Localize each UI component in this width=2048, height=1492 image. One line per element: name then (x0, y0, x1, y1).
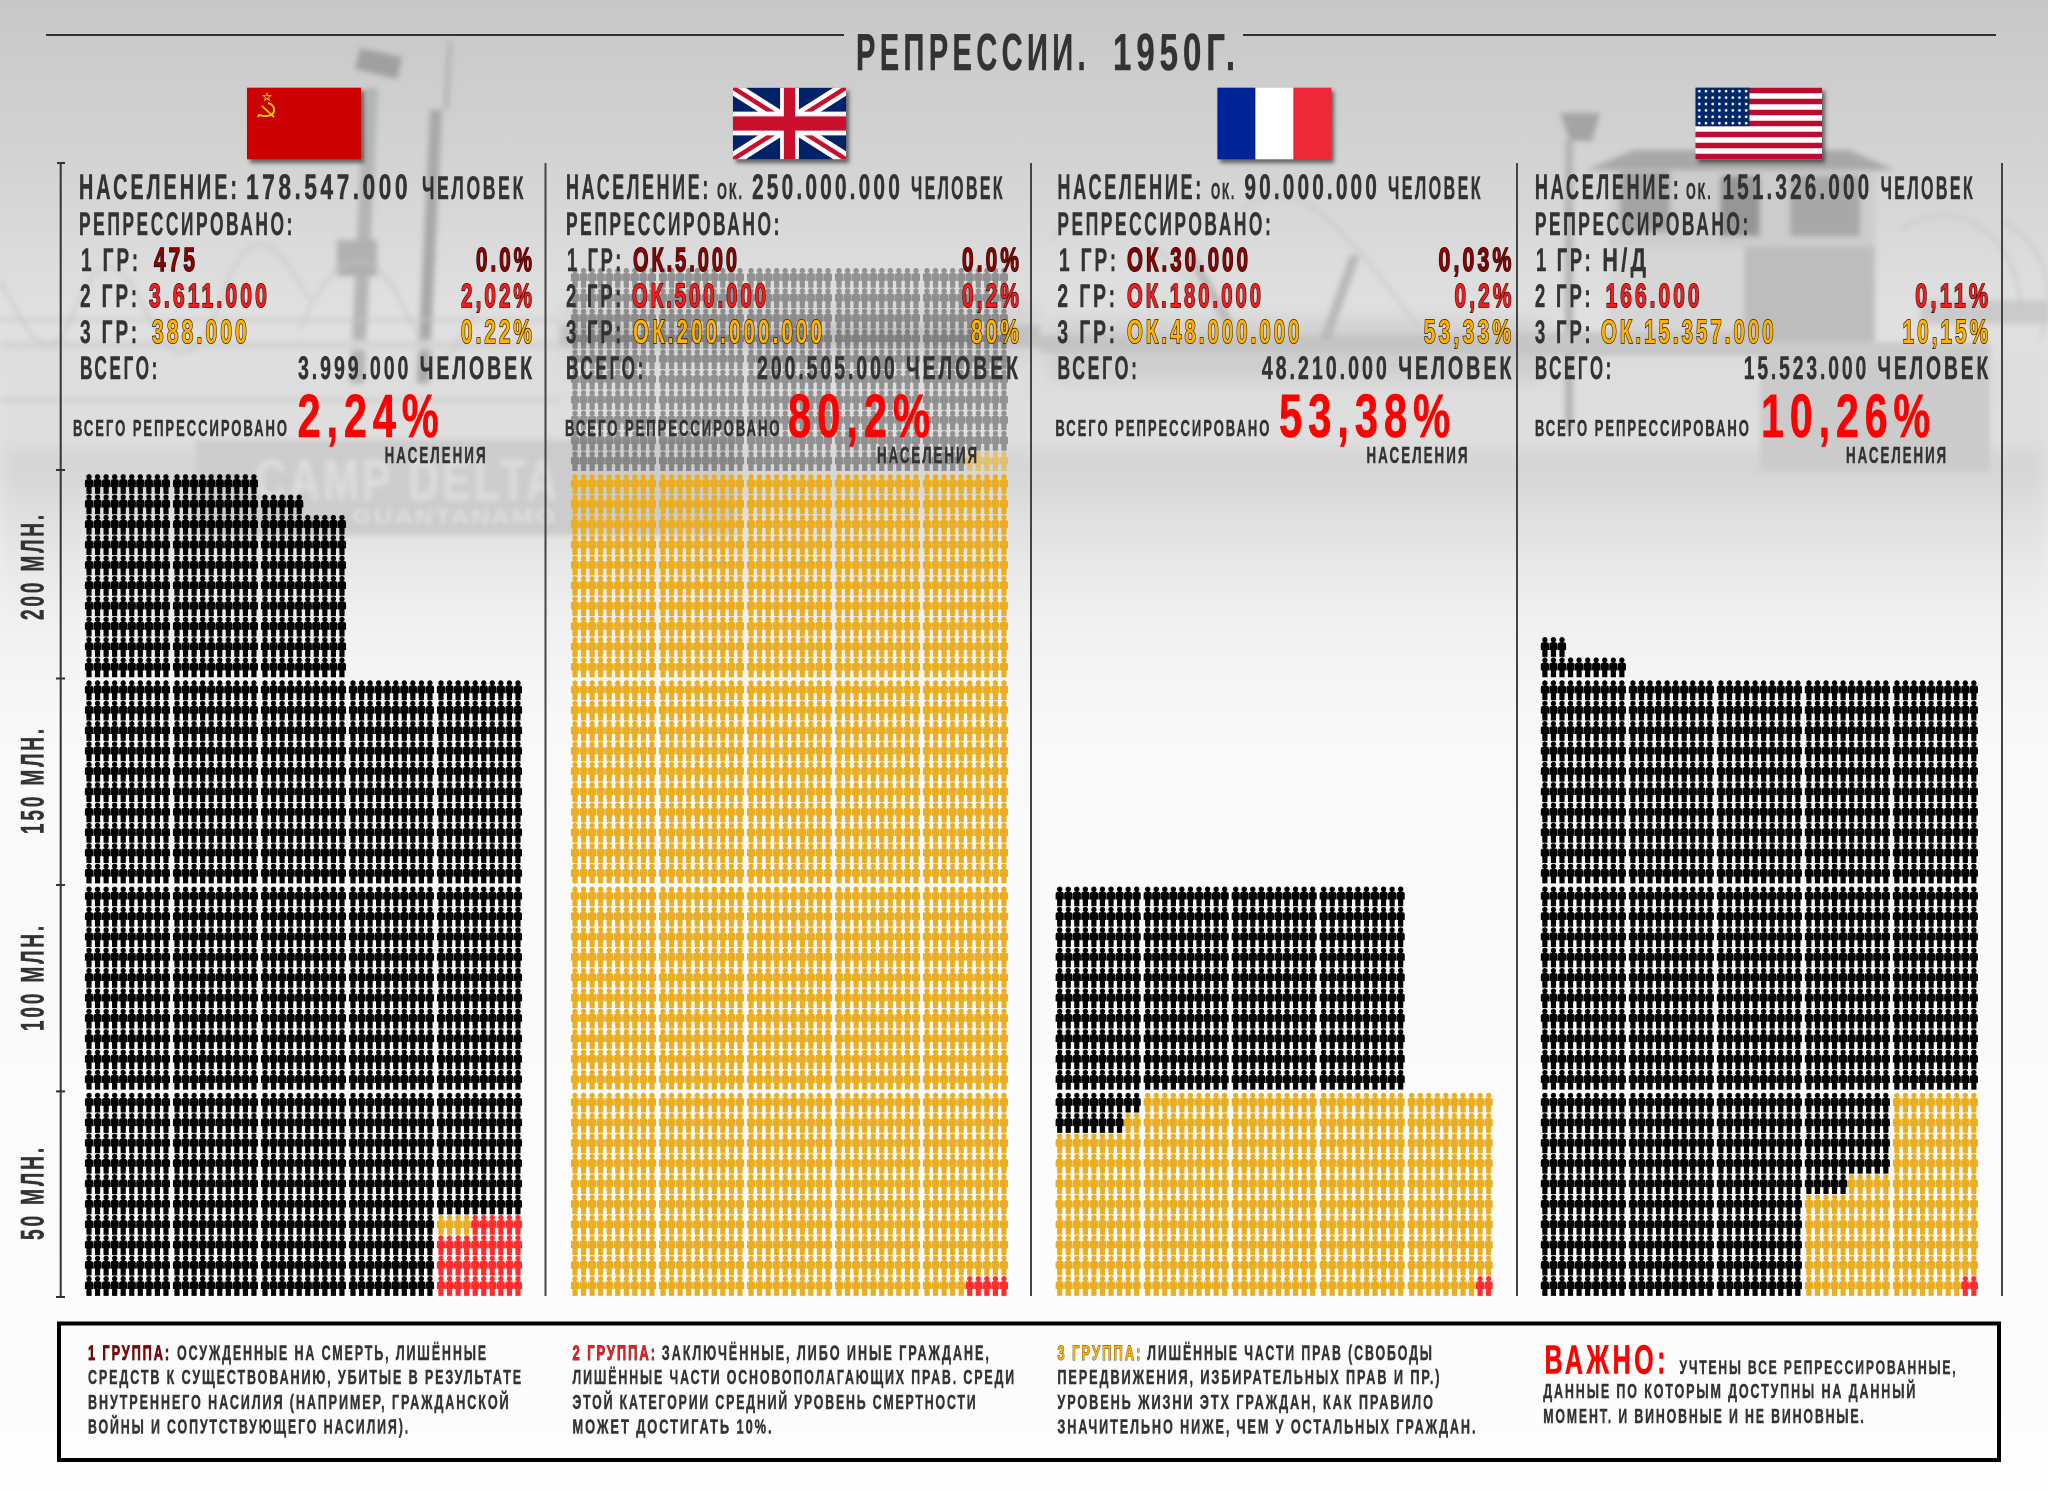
title (46, 24, 1996, 82)
flag: UK (733, 88, 849, 163)
stats: France: 53,33% (1424, 313, 1514, 350)
stats: USSR: РЕПРЕССИРОВАНО: (79, 206, 295, 242)
stats: UK: ОК.200.000.000 (633, 313, 825, 350)
stats: UK: 3 ГР: (566, 314, 624, 350)
panel: USA (1535, 88, 1991, 1296)
column dividers (546, 163, 2002, 1296)
stats: UK: ОК. (717, 178, 744, 204)
stats: UK: ВСЕГО: (566, 350, 646, 386)
stats: USA: 0,11% (1915, 277, 1991, 314)
stats: USSR: 178.547.000 (246, 168, 411, 207)
flag: USA (1696, 88, 1825, 163)
legend: group 3: ЛИШЁННЫЕ ЧАСТИ ПРАВ (СВОБОДЫ (1147, 1342, 1434, 1365)
stats: UK: ЧЕЛОВЕК (911, 170, 1005, 206)
stats: France: 48.210.000 ЧЕЛОВЕК (1262, 350, 1514, 386)
stats: UK: 200.505.000 ЧЕЛОВЕК (757, 350, 1021, 386)
flag: France (1217, 88, 1334, 163)
legend: group 2: МОЖЕТ ДОСТИГАТЬ 10%. (572, 1416, 774, 1438)
stats: USSR: ВСЕГО: (80, 350, 160, 386)
axis: population scale: 150 МЛН. (14, 726, 50, 834)
axis: population scale: 100 МЛН. (14, 923, 50, 1031)
stats: USSR: 3 ГР: (80, 314, 140, 350)
stats: UK: ВСЕГО РЕПРЕССИРОВАНО (565, 415, 782, 441)
legend: group 2: 2 ГРУППА: (572, 1341, 657, 1365)
legend: group 1: ВОЙНЫ И СОПУТСТВУЮЩЕГО НАСИЛИЯ). (88, 1414, 410, 1438)
legend: group 2: ЭТОЙ КАТЕГОРИИ СРЕДНИЙ УРОВЕНЬ СМЕРТНОСТИ (572, 1390, 978, 1414)
stats: USA: ОК.15.357.000 (1601, 313, 1777, 350)
stats: USA: НАСЕЛЕНИЕ: (1535, 168, 1682, 207)
stats: UK: 2 ГР: (566, 278, 624, 314)
stats: France: РЕПРЕССИРОВАНО: (1057, 206, 1273, 242)
stats: UK: ОК.5.000 (633, 241, 740, 278)
stats: USSR: 2 ГР: (80, 278, 140, 314)
legend: group 1: 1 ГРУППА: (88, 1341, 171, 1365)
stats: France: ВСЕГО: (1057, 350, 1140, 386)
stats: France: 1 ГР: (1059, 242, 1119, 278)
stats: UK: 1 ГР: (567, 242, 624, 278)
stats: USSR: ВСЕГО РЕПРЕССИРОВАНО (73, 415, 289, 441)
stats: UK: ОК.500.000 (632, 277, 769, 314)
stats: France: НАСЕЛЕНИЕ: (1057, 168, 1204, 207)
stats: USSR: 2,02% (461, 277, 535, 314)
legend: group 1 (88, 1341, 523, 1438)
stats: USA: Н/Д (1602, 242, 1649, 278)
callout: important note (1543, 1336, 1958, 1428)
stats: USA: РЕПРЕССИРОВАНО: (1535, 206, 1751, 242)
legend: group 1: ВНУТРЕННЕГО НАСИЛИЯ (НАПРИМЕР, ГРАЖДАНСКОЙ (88, 1390, 510, 1414)
chart: USSR population figures (85, 474, 522, 1296)
stats: UK: 250.000.000 (752, 168, 903, 207)
stats: USA: 2 ГР: (1535, 278, 1593, 314)
stats: USSR: НАСЕЛЕНИЕ: (79, 168, 240, 207)
stats: USA: 10,15% (1902, 313, 1991, 350)
stats: USA: 151.326.000 (1722, 168, 1872, 207)
stats: UK: НАСЕЛЕНИЯ (877, 442, 979, 468)
stats: UK: 0,2% (962, 277, 1022, 314)
stats: USSR: 3.999.000 ЧЕЛОВЕК (298, 350, 535, 386)
stats: France: ОК.30.000 (1127, 241, 1251, 278)
stats: USA: 10,26% (1761, 382, 1936, 450)
panel: UK (565, 88, 1022, 1296)
stats: USSR: 0.0% (476, 241, 535, 278)
stats: France: ЧЕЛОВЕК (1388, 170, 1483, 206)
axis: population scale: 50 МЛН. (14, 1145, 50, 1240)
stats: France: 3 ГР: (1057, 314, 1118, 350)
stats: France (1055, 168, 1514, 468)
stats: USA: ОК. (1686, 178, 1713, 204)
chart: USA population figures (1541, 637, 1978, 1296)
stats: France: 90.000.000 (1244, 168, 1380, 207)
stats: USA (1535, 168, 1991, 468)
title: РЕПРЕССИИ. (856, 24, 1090, 82)
stats: USSR: НАСЕЛЕНИЯ (385, 442, 488, 468)
legend: group 3 (1057, 1341, 1477, 1438)
stats: UK: РЕПРЕССИРОВАНО: (566, 206, 782, 242)
legend: group 1: ОСУЖДЕННЫЕ НА СМЕРТЬ, ЛИШЁННЫЕ (177, 1342, 488, 1365)
stats: USSR (73, 168, 535, 468)
stats: UK: 0.0% (962, 241, 1022, 278)
stats: USSR: 475 (154, 241, 198, 278)
stats: France: 2 ГР: (1057, 278, 1118, 314)
legend: group 3: УРОВЕНЬ ЖИЗНИ ЭТХ ГРАЖДАН, КАК ПРАВИЛО (1057, 1392, 1435, 1414)
stats: France: 53,38% (1279, 382, 1456, 450)
stats: France: ОК. (1211, 178, 1236, 204)
legend: group 2 (572, 1341, 1016, 1438)
stats: USA: 3 ГР: (1535, 314, 1593, 350)
stats: USA: НАСЕЛЕНИЯ (1846, 442, 1948, 468)
legend: group 3: ПЕРЕДВИЖЕНИЯ, ИЗБИРАТЕЛЬНЫХ ПРАВ И ПР.) (1057, 1367, 1441, 1389)
panel: USSR (73, 88, 535, 1296)
stats: France: НАСЕЛЕНИЯ (1366, 442, 1470, 468)
stats: USA: ВСЕГО РЕПРЕССИРОВАНО (1535, 415, 1751, 441)
stats: UK: 80% (971, 313, 1022, 350)
stats: France: ОК.48.000.000 (1127, 313, 1302, 350)
legend box (59, 1324, 1999, 1460)
title: 1950Г. (1113, 24, 1240, 82)
stats: UK: 80,2% (788, 382, 936, 450)
stats: USSR: 2,24% (298, 382, 444, 450)
stats: UK (565, 168, 1022, 468)
legend: group 3: 3 ГРУППА: (1057, 1341, 1142, 1365)
stats: France: 0,2% (1454, 277, 1514, 314)
callout: important note: ВАЖНО: (1544, 1336, 1669, 1382)
chart: France population figures (1056, 886, 1493, 1296)
stats: France: ВСЕГО РЕПРЕССИРОВАНО (1055, 415, 1271, 441)
stats: USA: 166.000 (1606, 277, 1703, 314)
legend: group 2: ЗАКЛЮЧЁННЫЕ, ЛИБО ИНЫЕ ГРАЖДАНЕ, (662, 1342, 991, 1365)
legend: group 3: ЗНАЧИТЕЛЬНО НИЖЕ, ЧЕМ У ОСТАЛЬНЫХ ГРАЖДАН. (1057, 1416, 1477, 1438)
stats: USSR: 3.611.000 (149, 277, 270, 314)
stats: USA: ВСЕГО: (1535, 350, 1614, 386)
flag: USSR (247, 88, 364, 163)
stats: France: ОК.180.000 (1127, 277, 1264, 314)
stats: France: 0,03% (1438, 241, 1514, 278)
stats: USSR: 0.22% (461, 313, 535, 350)
stats: USA: 1 ГР: (1536, 242, 1593, 278)
background photo: prison camp, faded: CAMP DELTA (255, 448, 560, 513)
stats: USSR: 1 ГР: (81, 242, 141, 278)
axis: population scale: 200 МЛН. (14, 512, 50, 620)
stats: USSR: 388.000 (152, 313, 250, 350)
legend: group 1: СРЕДСТВ К СУЩЕСТВОВАНИЮ, УБИТЫЕ В РЕЗУЛЬТАТЕ (88, 1367, 523, 1389)
panel: France (1055, 88, 1514, 1296)
chart: UK population figures (571, 268, 1008, 1296)
legend: group 2: ЛИШЁННЫЕ ЧАСТИ ОСНОВОПОЛАГАЮЩИХ ПРАВ. СРЕДИ (572, 1366, 1016, 1389)
stats: UK: НАСЕЛЕНИЕ: (566, 168, 711, 207)
background photo: prison camp, faded: GUANTANAMO (352, 507, 557, 528)
axis: population scale (14, 163, 65, 1297)
stats: USSR: ЧЕЛОВЕК (422, 170, 526, 206)
